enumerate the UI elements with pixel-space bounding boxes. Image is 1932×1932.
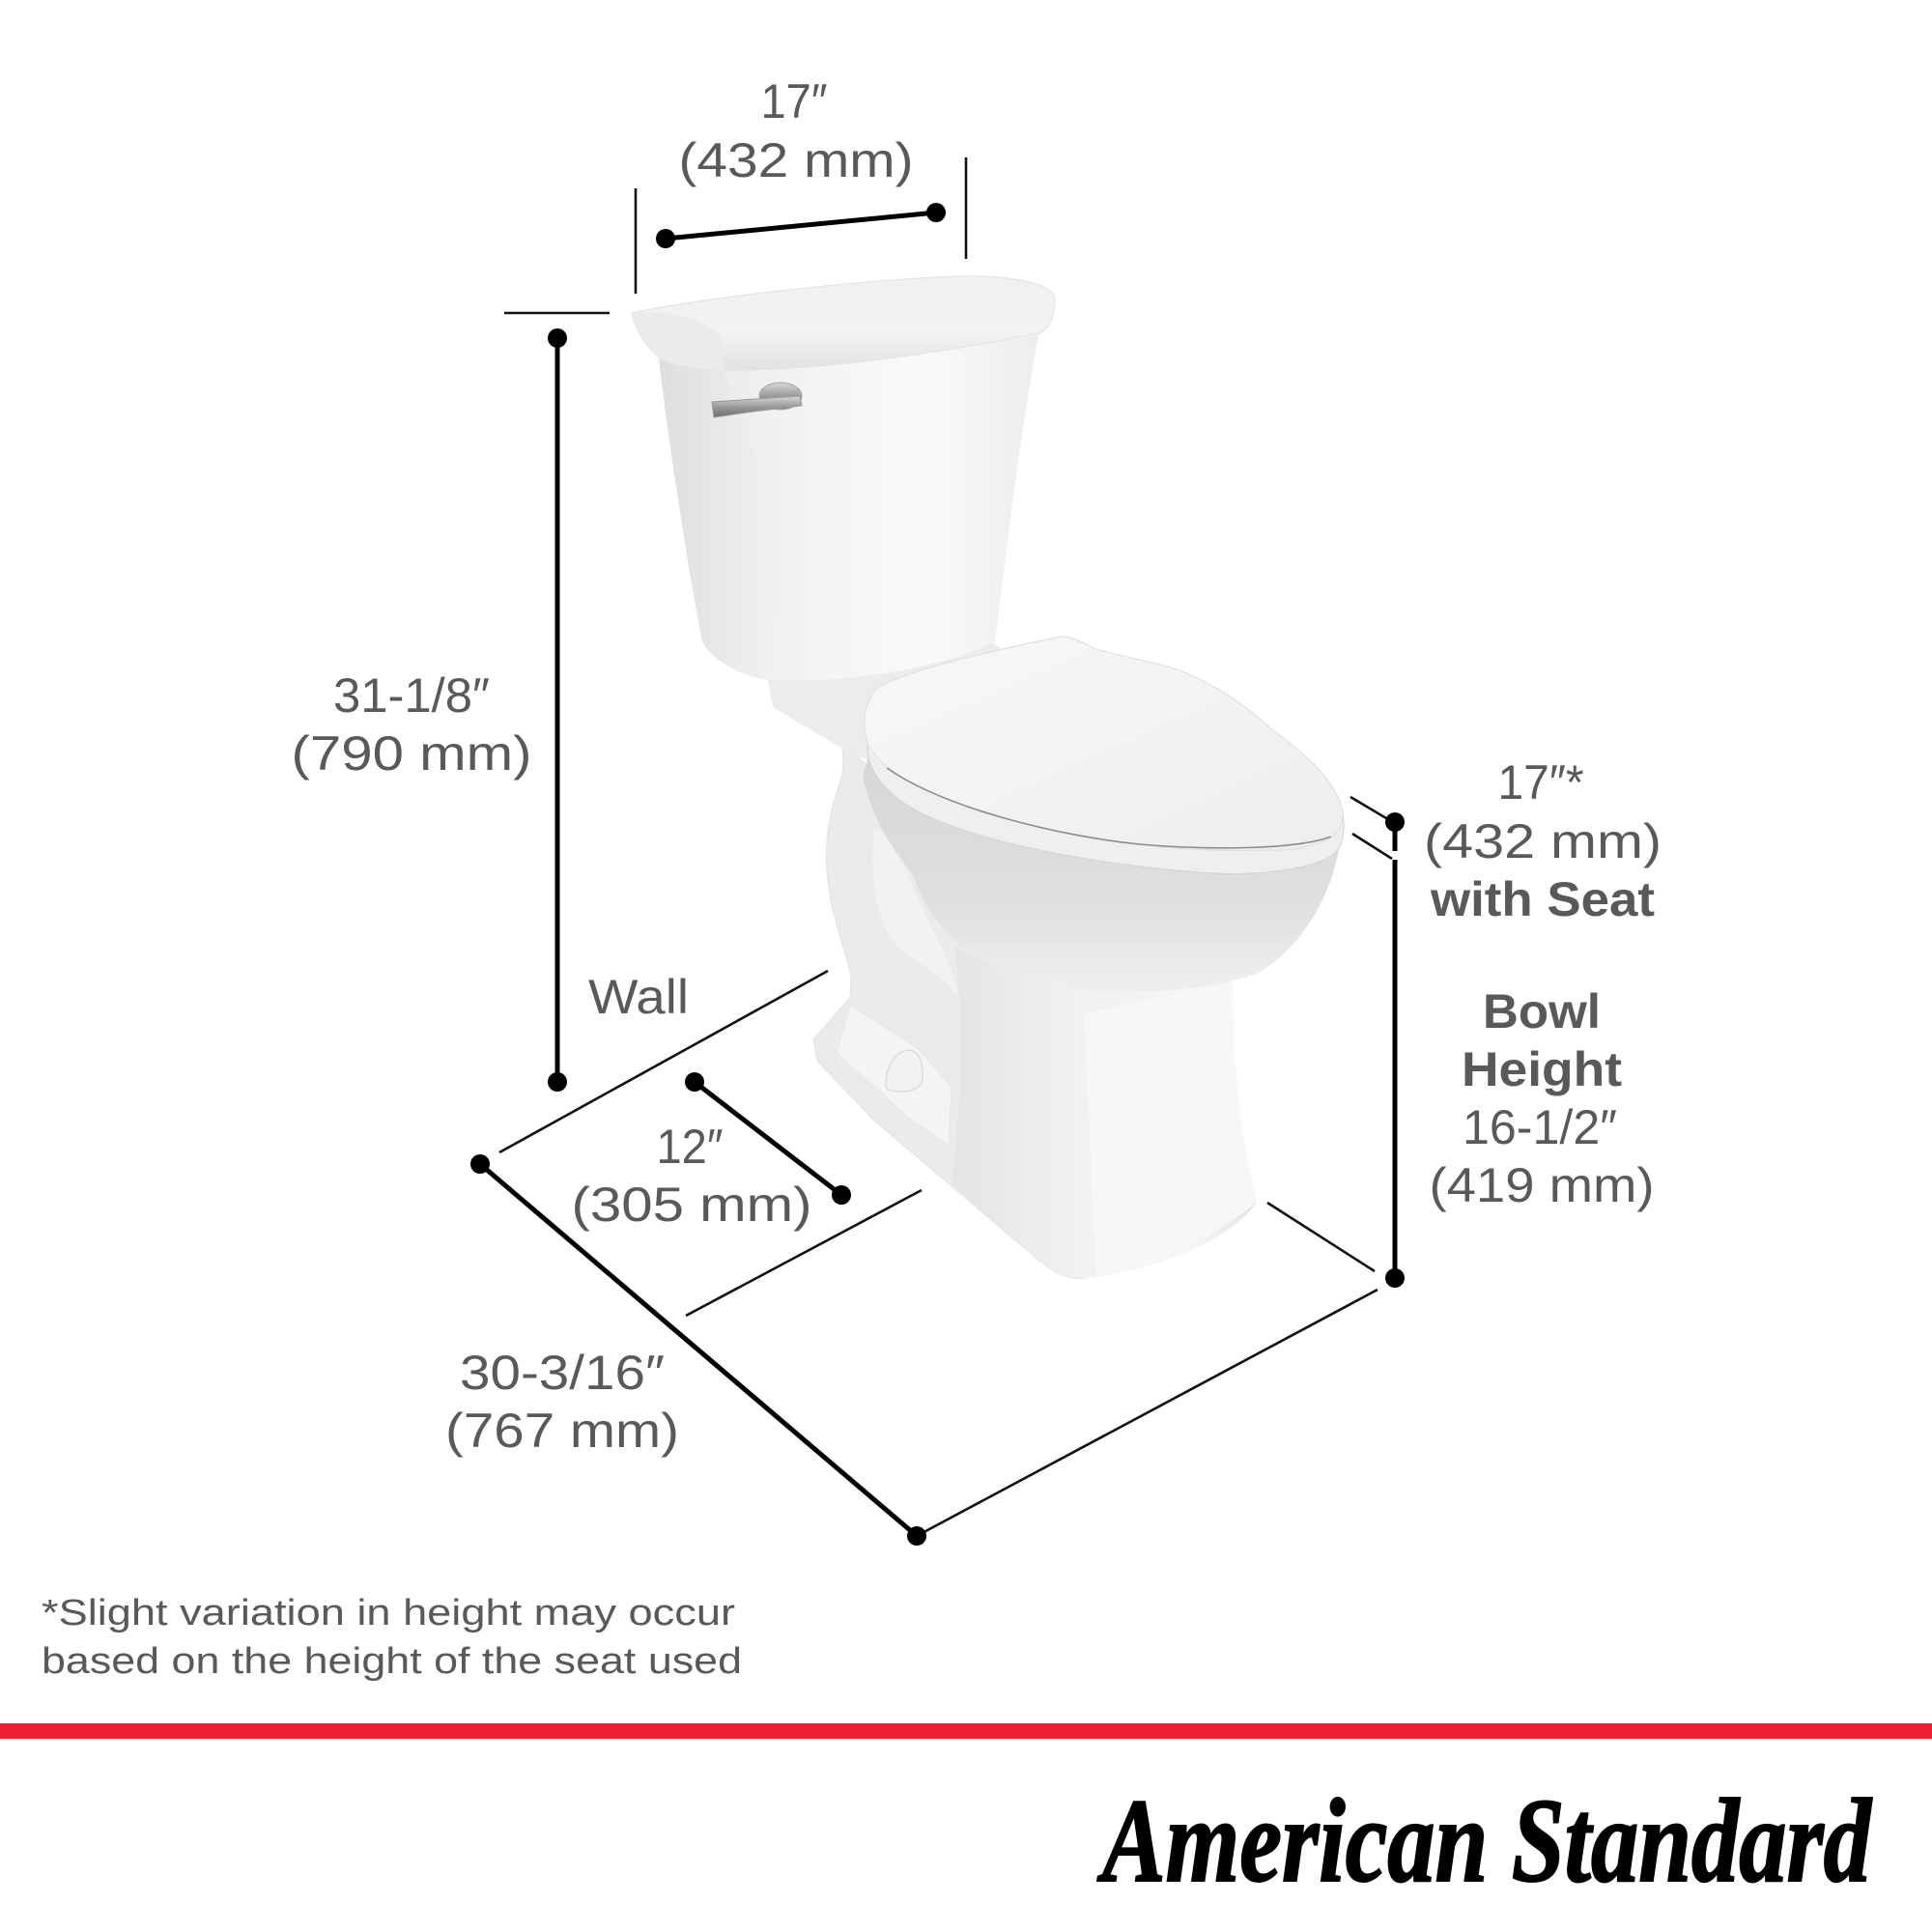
label: rough-in: 12″ (657, 1120, 723, 1174)
flush handle (712, 383, 802, 417)
handle escutcheon (759, 383, 802, 410)
label: depth: 30-3/16″ (460, 1346, 665, 1400)
bowl top tick (1352, 834, 1392, 859)
top dot (548, 328, 567, 348)
pedestal front facet (1084, 981, 1257, 1277)
floor tick at bowl front (1267, 1203, 1375, 1271)
top dot (685, 1072, 704, 1092)
label: wall: Wall (588, 970, 689, 1024)
illustration: two-piece toilet (632, 276, 1344, 1278)
toilet bowl (863, 753, 1341, 992)
dimension: seat and bowl height (1350, 797, 1405, 1288)
tank lid (632, 276, 1055, 370)
label: 17″ (761, 74, 827, 128)
tank connector (768, 638, 1005, 763)
footnote (42, 1593, 742, 1682)
bottom dot (1385, 1268, 1405, 1288)
red divider band (0, 1723, 1932, 1739)
left end dot (656, 229, 675, 248)
label: depth metric: (767 mm) (445, 1404, 679, 1458)
front dot (907, 1526, 926, 1546)
dimension: tank width 17 in (636, 74, 966, 294)
label: seat height metric: (432 mm) (1424, 814, 1662, 868)
bolt cap (886, 1050, 923, 1092)
top tick (504, 312, 610, 314)
label: overall height: 31-1/8″ (333, 668, 490, 723)
tank front (659, 330, 1039, 681)
label: bowl: Bowl (1483, 984, 1601, 1038)
footnote: based on the height of the seat used (42, 1641, 742, 1682)
trap recess (872, 830, 958, 1000)
seat height segment (1393, 822, 1397, 851)
bowl height segment (1393, 860, 1397, 1278)
rear dot (470, 1154, 490, 1174)
dimension: depth 30-3/16 in (470, 1154, 1378, 1546)
right end dot (926, 203, 946, 222)
wall reference line (499, 971, 828, 1152)
label: bowl height metric: (419 mm) (1430, 1158, 1654, 1212)
left extension tick (635, 188, 637, 294)
label: seat height: 17″* (1497, 755, 1584, 810)
dimension: rough-in 12 in (685, 1072, 851, 1205)
front base line (917, 1290, 1378, 1536)
seat lid (865, 637, 1343, 851)
seat ring (867, 736, 1344, 873)
toilet trapway and base (813, 739, 1092, 1278)
depth line (480, 1164, 917, 1536)
bottom dot (832, 1185, 851, 1205)
footnote: *Slight variation in height may occur (42, 1593, 735, 1634)
dimension: overall height (504, 313, 610, 1092)
label: rough-in metric: (305 mm) (572, 1178, 811, 1232)
dimension line (666, 213, 936, 239)
rough-in reference line (686, 1190, 922, 1316)
bottom dot (548, 1072, 567, 1092)
height line (554, 338, 560, 1082)
label: tank width metric: (432 mm) (678, 133, 914, 187)
toilet base recess (837, 1005, 952, 1145)
right extension tick (965, 157, 967, 259)
seat top tick (1350, 797, 1386, 818)
seat shadow line (887, 768, 1331, 848)
label: height: Height (1462, 1042, 1622, 1096)
tank side facet (659, 359, 781, 680)
label: bowl height value: 16-1/2″ (1463, 1100, 1617, 1154)
label: overall height metric: (790 mm) (292, 726, 531, 781)
dimension line (695, 1082, 841, 1195)
top dot (1385, 812, 1405, 832)
toilet pedestal front (952, 947, 1257, 1278)
lid chamfer (632, 312, 724, 370)
label: with seat: with Seat (1430, 872, 1655, 926)
handle lever (712, 396, 802, 417)
